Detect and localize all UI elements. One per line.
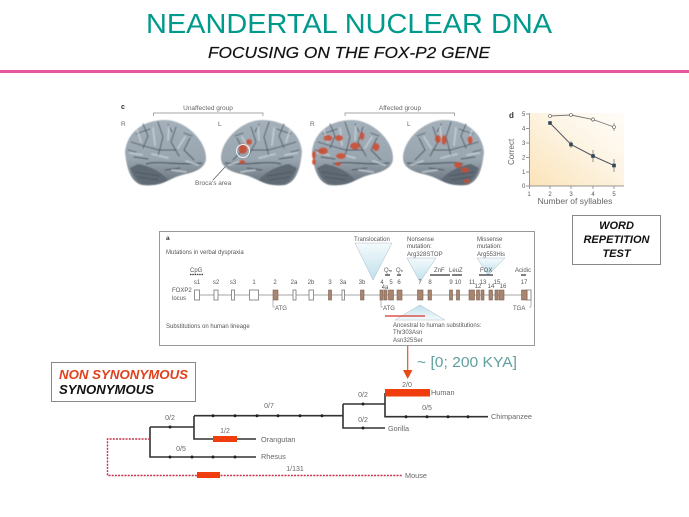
mutation callout: missense: Missense (477, 237, 503, 243)
CpG label: CpG (190, 268, 203, 274)
axis tick labels: 5 (612, 192, 616, 198)
exon numbers: 10 (455, 280, 462, 286)
brain: unaffected right (125, 120, 206, 185)
exon numbers: 5 (389, 280, 393, 286)
axis tick labels: 3 (569, 192, 573, 198)
mutation callout: translocation: Translocation (354, 237, 390, 243)
exon numbers: 14 (488, 284, 495, 290)
locus line with exons (194, 290, 531, 300)
panel frame (160, 232, 534, 346)
branch substitution counts: 2/0 (402, 382, 412, 389)
branch substitution counts: 1/131 (286, 466, 304, 473)
exon numbers: 8 (428, 280, 432, 286)
exon numbers: 9 (449, 280, 453, 286)
start and stop codon markers: ATG (383, 306, 395, 312)
branch substitution counts (165, 382, 432, 473)
unaffected series (548, 114, 616, 131)
panel letter d: d (509, 111, 514, 120)
callout: word repetition test: TEST (602, 248, 632, 260)
phylogenetic tree (108, 382, 532, 480)
callout: word repetition test: WORD (599, 220, 634, 232)
exon numbers: 16 (500, 284, 507, 290)
species labels: Chimpanzee (491, 412, 532, 421)
protein domain labels: ZnF (434, 268, 445, 274)
panel letter a: a (166, 235, 170, 242)
axis tick labels: 0 (522, 184, 526, 190)
exon numbers: 13 (480, 280, 487, 286)
brain: affected right (312, 120, 393, 185)
axis tick labels: 4 (591, 192, 595, 198)
mutation callout: missense (477, 237, 505, 275)
axis tick labels: 2 (548, 192, 552, 198)
branch substitution counts: 0/2 (358, 392, 368, 399)
x axis title: Number of syllables (538, 196, 612, 206)
hemisphere labels (121, 121, 411, 128)
axis tick labels (522, 112, 616, 198)
mouse dashed branch (108, 439, 402, 476)
hemisphere labels: R (310, 121, 315, 128)
mutation callout: missense: mutation: (477, 244, 502, 250)
mutation callout: nonsense: mutation: (407, 244, 432, 250)
arrow: to human lineage (403, 346, 412, 379)
legend (52, 362, 196, 402)
axis tick labels: 3 (522, 141, 526, 147)
exon numbers: 4 (380, 280, 384, 286)
axis tick labels: 2 (522, 156, 526, 162)
mutation callout: missense: Arg553His (477, 252, 505, 258)
exon numbers: 2a (291, 280, 298, 286)
panel letter c: c (121, 104, 125, 111)
locus label: locus (172, 296, 186, 302)
species labels (261, 388, 532, 480)
start and stop codon markers: TGA (513, 306, 525, 312)
line chart: correct vs number of syllables (507, 111, 624, 206)
protein domain labels: Qₙ (396, 268, 404, 274)
axis tick labels: 1 (527, 192, 531, 198)
branch nodes (168, 402, 470, 458)
start and stop codon markers (273, 300, 531, 312)
axis tick labels: 1 (522, 170, 526, 176)
hemisphere labels: L (407, 121, 411, 128)
exon numbers: 11 (469, 280, 476, 286)
mutation callout: nonsense: Arg328STOP (407, 252, 443, 258)
protein domain labels: LeuZ (449, 268, 463, 274)
non-synonymous bars (197, 389, 430, 478)
branch substitution counts: 0/7 (264, 403, 274, 410)
exon numbers: 3b (359, 280, 366, 286)
exon numbers: 6 (397, 280, 401, 286)
chart background (529, 113, 624, 186)
exon numbers: 15 (494, 280, 501, 286)
tree branches (150, 393, 488, 457)
ancestral substitutions callout: Asn325Ser (393, 338, 423, 344)
unaffected group bracket (154, 105, 263, 116)
brain: unaffected left with Broca's area: Broca's area (195, 180, 232, 187)
brain: unaffected left with Broca's area (195, 120, 302, 187)
axis tick labels: 5 (522, 112, 526, 118)
exon numbers: 7 (418, 280, 422, 286)
exon numbers: 3 (328, 280, 332, 286)
axis tick labels: 4 (522, 126, 526, 132)
time range label: ~ [0; 200 KYA] (417, 355, 517, 371)
branch substitution counts: 0/2 (358, 417, 368, 424)
species labels: Gorilla (388, 424, 410, 433)
panel: brain scans (121, 104, 484, 187)
locus label: FOXP2 (172, 288, 192, 294)
unaffected group bracket: Unaffected group (183, 105, 233, 112)
affected group bracket: Affected group (379, 105, 421, 112)
start and stop codon markers: ATG (275, 306, 287, 312)
exon numbers: 4a (382, 285, 389, 291)
branch substitution counts: 0/5 (176, 446, 186, 453)
hemisphere labels: R (121, 121, 126, 128)
row label: mutations: Mutations in verbal dyspraxia (166, 250, 244, 256)
exon numbers: s1 (194, 280, 201, 286)
exon numbers: 1 (252, 280, 256, 286)
protein domain labels: Acidic (515, 268, 531, 274)
callout: word repetition test (572, 216, 660, 264)
ancestral substitutions callout: Thr303Asn (393, 330, 422, 336)
exon numbers: 2 (273, 280, 277, 286)
hemisphere labels: L (218, 121, 222, 128)
species labels: Rhesus (261, 452, 286, 461)
exon numbers: 17 (521, 280, 528, 286)
legend: synonymous: SYNONYMOUS (59, 383, 155, 397)
exon numbers: s2 (213, 280, 220, 286)
branch substitution counts: 0/2 (165, 415, 175, 422)
ancestral substitutions callout (385, 305, 482, 344)
affected group bracket (345, 105, 454, 116)
substitutions row label: Substitutions on human lineage (166, 324, 250, 330)
protein domain labels (384, 268, 531, 275)
legend: non synonymous: NON SYNONYMOUS (59, 368, 189, 382)
brain: affected left (403, 120, 484, 185)
protein domain labels: Qₘ (384, 268, 393, 274)
mutation callout: nonsense (407, 237, 443, 282)
panel: FOXP2 gene locus diagram (160, 232, 534, 346)
exon numbers: 12 (475, 284, 482, 290)
protein domain labels: FOX (480, 268, 492, 274)
mutation callout: translocation (354, 237, 392, 280)
ancestral substitutions callout: Ancestral to human substitutions: (393, 323, 482, 329)
exon numbers (194, 280, 528, 291)
exon numbers: 3a (340, 280, 347, 286)
mutation callout: nonsense: Nonsense (407, 237, 435, 243)
axes (526, 113, 624, 189)
exon numbers: 2b (308, 280, 315, 286)
affected series (548, 121, 616, 172)
species labels: Human (431, 388, 455, 397)
callout: word repetition test: REPETITION (583, 234, 651, 246)
branch substitution counts: 0/5 (422, 405, 432, 412)
y axis title: Correct (507, 138, 516, 165)
subtitle: FOCUSING ON THE FOX-P2 GENE (208, 45, 491, 62)
title: NEANDERTAL NUCLEAR DNA (146, 8, 552, 39)
pink divider (0, 70, 689, 73)
branch substitution counts: 1/2 (220, 428, 230, 435)
species labels: Orangutan (261, 435, 295, 444)
exon numbers: s3 (230, 280, 237, 286)
species labels: Mouse (405, 471, 427, 480)
